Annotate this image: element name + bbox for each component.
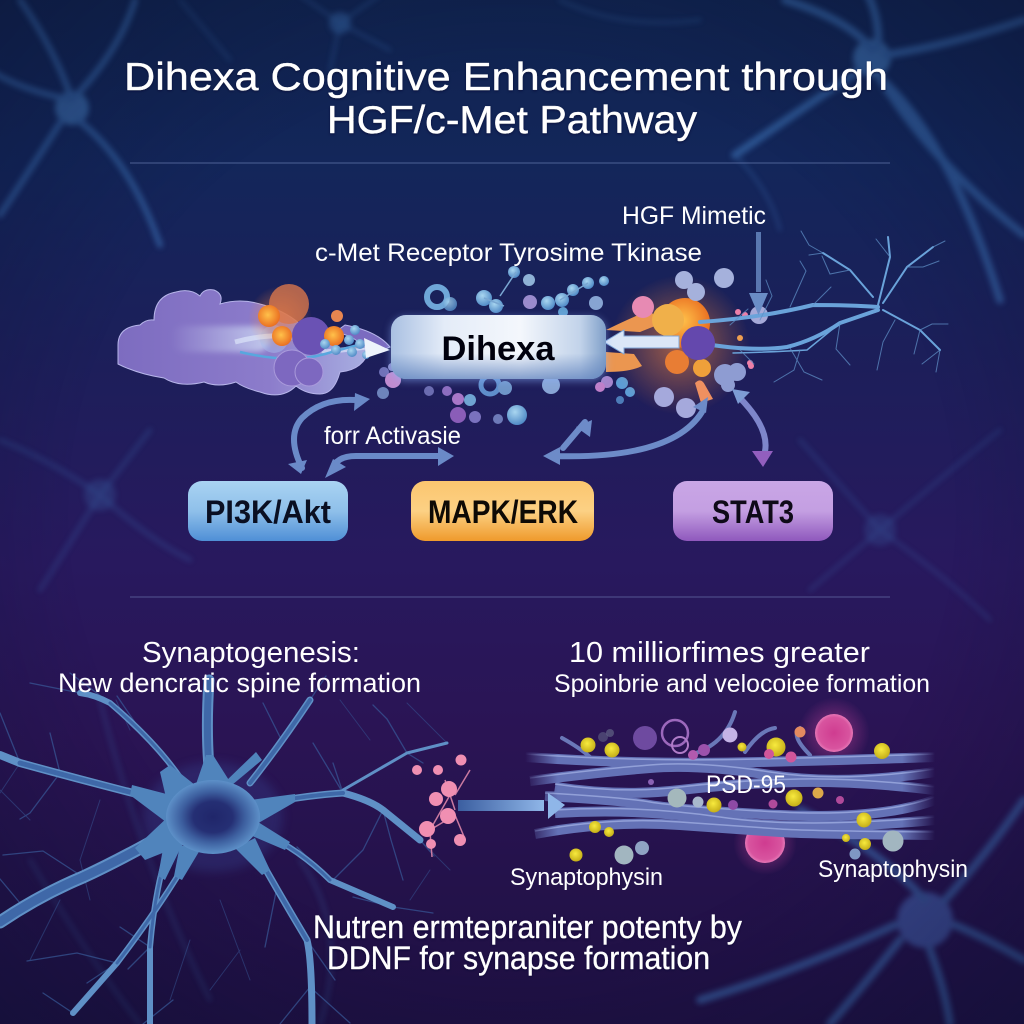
label: HGF Mimetic: HGF Mimetic [622,202,766,230]
node: STAT3 [673,481,833,541]
title: Dihexa Cognitive Enhancement through [124,56,888,99]
label: activation: forr Activasie [324,422,461,450]
heading: potency: Spoinbrie and velocoiee formation [554,670,930,698]
heading: synaptogenesis: Synaptogenesis: [142,637,360,669]
arrow: Dihexa to PI3K loop [294,400,442,470]
arrowheads right [543,397,708,465]
footer statement [313,909,742,976]
illustration: molecule clusters around Dihexa [377,266,635,425]
illustration: left receptor cloud [118,284,390,395]
arrow: to synaptic filaments [458,793,565,819]
illustration: right dendrite with purple soma [604,231,948,418]
node: STAT3: STAT3 [712,494,794,530]
title: HGF/c-Met Pathway [327,99,698,142]
illustration: large neuron [0,673,450,1024]
node: MAPK/ERK: MAPK/ERK [428,494,578,530]
heading: synaptogenesis [58,637,421,698]
footer statement: DDNF for synapse formation [327,940,710,976]
illustration: synapse filament bundle [525,697,935,875]
arrow: HGF mimetic down [749,232,768,315]
heading: synaptogenesis: New dencratic spine formation [58,668,421,698]
arrow: to STAT3 [732,389,773,467]
label: PSD-95: PSD-95 [706,771,786,799]
title [124,56,888,142]
footer statement: Nutren ermtepraniter potenty by [313,909,742,945]
label: c-Met receptor: c-Met Receptor Tyrosime Tkinase [315,239,702,267]
node: Dihexa: Dihexa [442,330,556,368]
node: PI3K/Akt [188,481,348,541]
arrow: right loop to MAPK [552,412,702,456]
label: Synaptophysin right: Synaptophysin [818,856,968,883]
node: Dihexa [391,315,606,379]
illustration: pink molecule chain [412,754,470,857]
heading: potency [554,637,930,698]
heading: potency: 10 milliorfimes greater [569,637,870,669]
node: MAPK/ERK [411,481,594,541]
arrowheads left [288,393,454,478]
label: Synaptophysin left: Synaptophysin [510,864,663,891]
node: PI3K/Akt: PI3K/Akt [205,494,331,530]
